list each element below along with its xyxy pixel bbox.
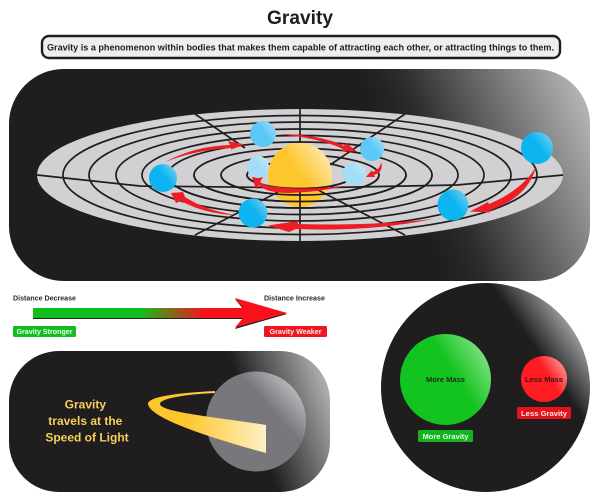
less gravity tag (517, 407, 571, 419)
gravity weaker tag: Gravity Weaker (270, 327, 322, 336)
distance increase label: Distance Increase (264, 294, 325, 302)
gray body (206, 372, 306, 472)
less mass circle (521, 356, 567, 402)
more mass circle: More Mass (426, 375, 465, 384)
gradient arrow (33, 298, 287, 329)
more mass circle (400, 334, 491, 425)
definition box (42, 36, 560, 58)
panel: mass comparison (381, 283, 590, 492)
gravity weaker tag (264, 326, 327, 337)
less gravity tag: Less Gravity (521, 409, 568, 418)
more gravity tag (418, 430, 473, 442)
panel: speed of light (9, 351, 330, 492)
planets (149, 121, 553, 228)
sun (268, 143, 332, 207)
less mass circle: Less Mass (525, 375, 563, 384)
distance decrease label: Distance Decrease (13, 294, 76, 302)
comet swoosh (148, 391, 266, 453)
definition box: Gravity is a phenomenon within bodies that makes them capable of attracting each other, or attracting things to them. (47, 42, 554, 52)
panel: orbit diagram (9, 69, 590, 281)
more gravity tag: More Gravity (422, 432, 469, 441)
orbit arrows (165, 134, 536, 232)
distance scale (13, 294, 327, 337)
gravity stronger tag: Gravity Stronger (16, 327, 73, 336)
title: Gravity (267, 8, 333, 29)
speed of light text: travels at the (48, 414, 123, 428)
orbit disc (37, 109, 563, 241)
speed of light text: Gravity (65, 398, 106, 412)
speed of light text: Speed of Light (45, 430, 129, 444)
